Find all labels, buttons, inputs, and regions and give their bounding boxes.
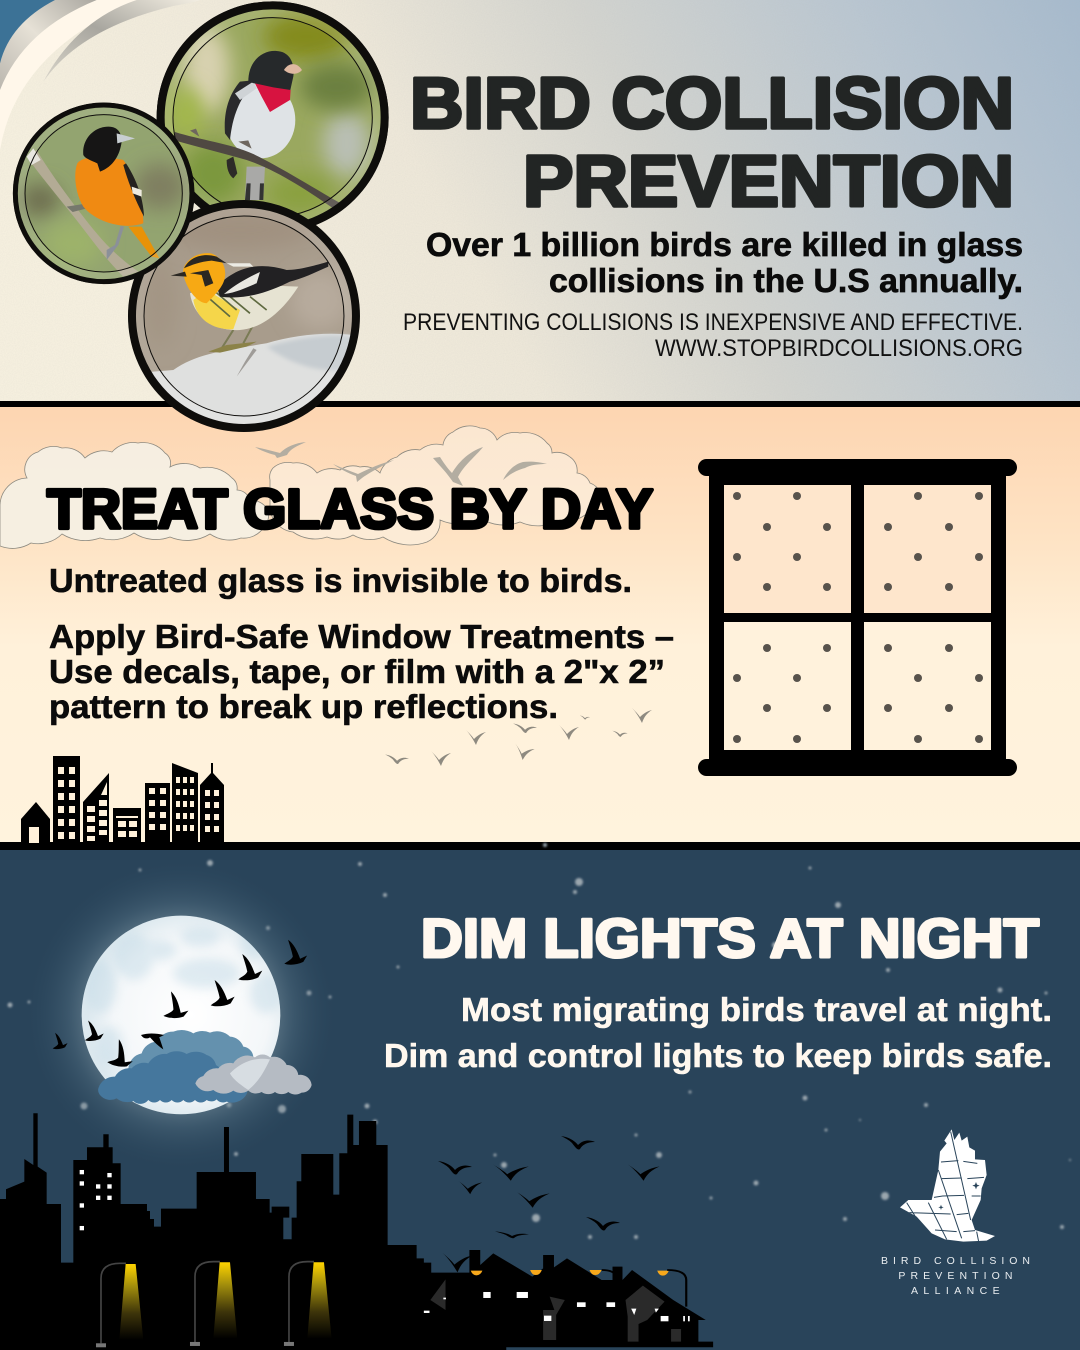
header statistic bbox=[426, 226, 1023, 299]
decorative corner swoosh bbox=[0, 0, 200, 150]
divider bar: day and night panels bbox=[0, 842, 1080, 850]
photo circle: rose-breasted grosbeak bbox=[157, 0, 390, 233]
day body text: pattern to break up reflections. bbox=[49, 688, 558, 725]
night sky stars bbox=[8, 843, 1071, 1239]
day body text: Use decals, tape, or film with a 2"x 2” bbox=[49, 653, 665, 690]
moon with glow bbox=[54, 887, 311, 1142]
panel: header background bbox=[0, 0, 1080, 402]
logo wordmark: BIRD COLLISION bbox=[881, 1255, 1035, 1267]
night body text bbox=[384, 991, 1052, 1074]
logo wordmark: ALLIANCE bbox=[911, 1285, 1005, 1297]
photo circle: blackburnian warbler bbox=[128, 200, 362, 433]
divider bar: header and day panels bbox=[0, 401, 1080, 407]
main title bbox=[410, 64, 1014, 222]
logo: bird collision prevention alliance bbox=[881, 1129, 1035, 1297]
night heading: DIM LIGHTS AT NIGHT bbox=[421, 907, 1039, 969]
panel: dim lights at night background bbox=[0, 842, 1080, 1350]
night city skyline bbox=[0, 1113, 417, 1350]
header statistic: collisions in the U.S annually. bbox=[549, 262, 1023, 299]
main title: BIRD COLLISION bbox=[410, 64, 1014, 144]
header subtext and website: WWW.STOPBIRDCOLLISIONS.ORG bbox=[655, 335, 1023, 362]
main title: PREVENTION bbox=[523, 142, 1014, 222]
icon: white bird made of window panes bbox=[900, 1129, 995, 1242]
small migrating birds bbox=[385, 708, 652, 766]
street lamps bbox=[96, 1262, 332, 1347]
panel: treat glass by day background bbox=[0, 407, 1080, 843]
birds crossing the moon bbox=[53, 940, 307, 1070]
gulls over the clouds bbox=[255, 442, 547, 486]
birds flying over houses bbox=[438, 1136, 660, 1272]
photo circle: baltimore oriole bbox=[13, 103, 195, 285]
night body text: Dim and control lights to keep birds safe. bbox=[384, 1037, 1052, 1074]
night body text: Most migrating birds travel at night. bbox=[461, 991, 1052, 1028]
day heading: TREAT GLASS BY DAY bbox=[47, 477, 653, 540]
neighborhood houses with lamps bbox=[400, 1245, 713, 1350]
logo wordmark bbox=[881, 1255, 1035, 1297]
logo wordmark: PREVENTION bbox=[898, 1270, 1018, 1282]
header subtext and website bbox=[403, 309, 1023, 362]
icon: daytime city skyline bbox=[21, 756, 224, 843]
header paper grain bbox=[0, 0, 1080, 402]
day body text: Apply Bird-Safe Window Treatments – bbox=[49, 618, 674, 655]
clouds behind day heading bbox=[0, 426, 600, 548]
day body text: Untreated glass is invisible to birds. bbox=[49, 562, 632, 599]
day body text bbox=[49, 562, 674, 725]
clouds in front of moon bbox=[98, 1030, 312, 1104]
icon: window with dot pattern bbox=[698, 459, 1017, 776]
header statistic: Over 1 billion birds are killed in glass bbox=[426, 226, 1023, 263]
